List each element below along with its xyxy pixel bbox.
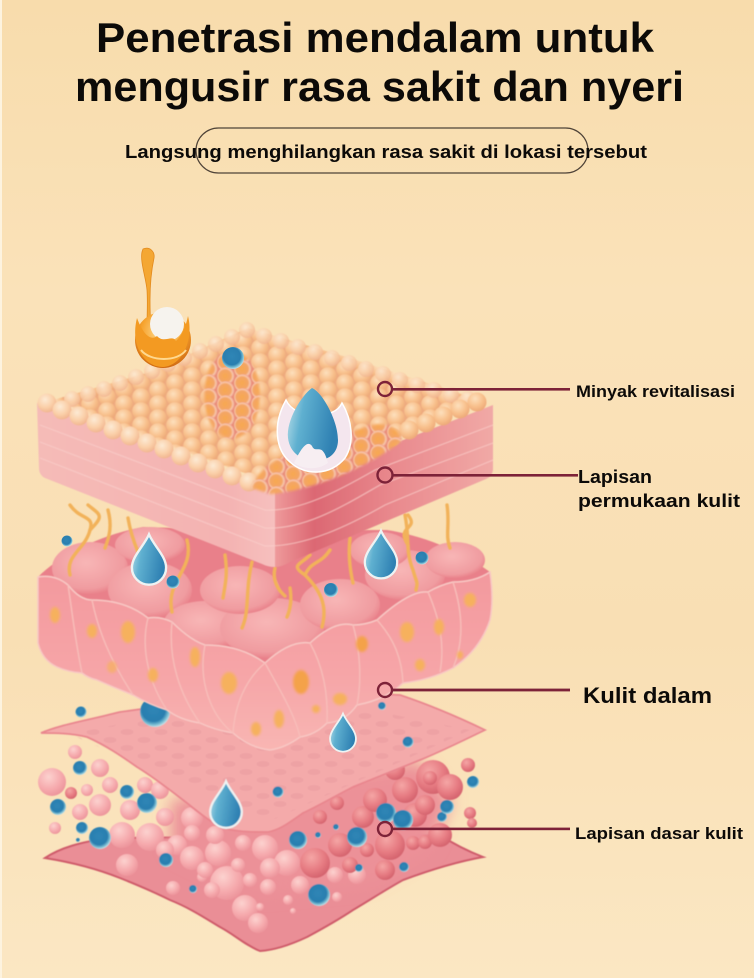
blue drop on sheet [210, 781, 242, 828]
icon: large water drop in white cup [277, 388, 351, 472]
callout: Kulit dalam [378, 683, 712, 708]
callout: Minyak revitalisasi: Minyak revitalisasi [576, 383, 735, 401]
slab strata lines [40, 425, 493, 546]
subtitle: Langsung menghilangkan rasa sakit di lokasi tersebut [125, 142, 647, 162]
edge beads, front right [382, 392, 486, 446]
cell divider lines [68, 582, 461, 737]
slab right side [275, 405, 493, 567]
golden nerve threads [69, 505, 450, 628]
small blue spheres among threads [62, 536, 428, 597]
icon: golden oil drop with capsule [135, 248, 191, 368]
blue drop, upper right [365, 531, 397, 578]
callout: Kulit dalam: Kulit dalam [583, 683, 712, 708]
pink bubbles [38, 745, 366, 933]
top pillow face [38, 527, 490, 680]
bottom sheet [45, 835, 483, 951]
deep backdrop behind bubbles [170, 760, 452, 895]
subtitle pill outline [196, 128, 588, 173]
blue drop behind cells, left [140, 697, 170, 727]
layer 2: deep skin cells [38, 527, 492, 750]
callout: Minyak revitalisasi [378, 382, 735, 401]
layer 4: skin base with bubbles [38, 745, 483, 951]
orange nuclei spots [50, 593, 476, 736]
callout: Lapisan permukaan kulit: permukaan kulit [578, 490, 740, 511]
title [75, 14, 684, 110]
callout: Lapisan permukaan kulit: Lapisan [578, 466, 652, 487]
orange bead patches [202, 352, 403, 496]
beaded top face [46, 328, 480, 484]
blue bubbles [50, 761, 479, 906]
sheet surface [41, 690, 485, 832]
front scalloped cell wall [38, 572, 492, 750]
edge beads, front left [38, 394, 258, 492]
slab left side [37, 403, 275, 567]
callout: Lapisan dasar kulit [378, 822, 744, 843]
icon: blue sphere on surface [222, 347, 244, 369]
title: Penetrasi mendalam untuk [96, 14, 655, 61]
callout: Lapisan dasar kulit: Lapisan dasar kulit [575, 825, 744, 843]
small blue dots on sheet [76, 702, 414, 798]
blue drop, lower right [330, 714, 356, 752]
title: mengusir rasa sakit dan nyeri [75, 63, 684, 110]
layer 3: dermal sheet [41, 690, 485, 832]
deep red bubbles [65, 758, 477, 880]
layer 1: skin surface slab [37, 322, 493, 567]
callout: Lapisan permukaan kulit [378, 466, 740, 511]
blue drop, upper left [132, 534, 166, 585]
edge beads, back rows [64, 322, 476, 407]
